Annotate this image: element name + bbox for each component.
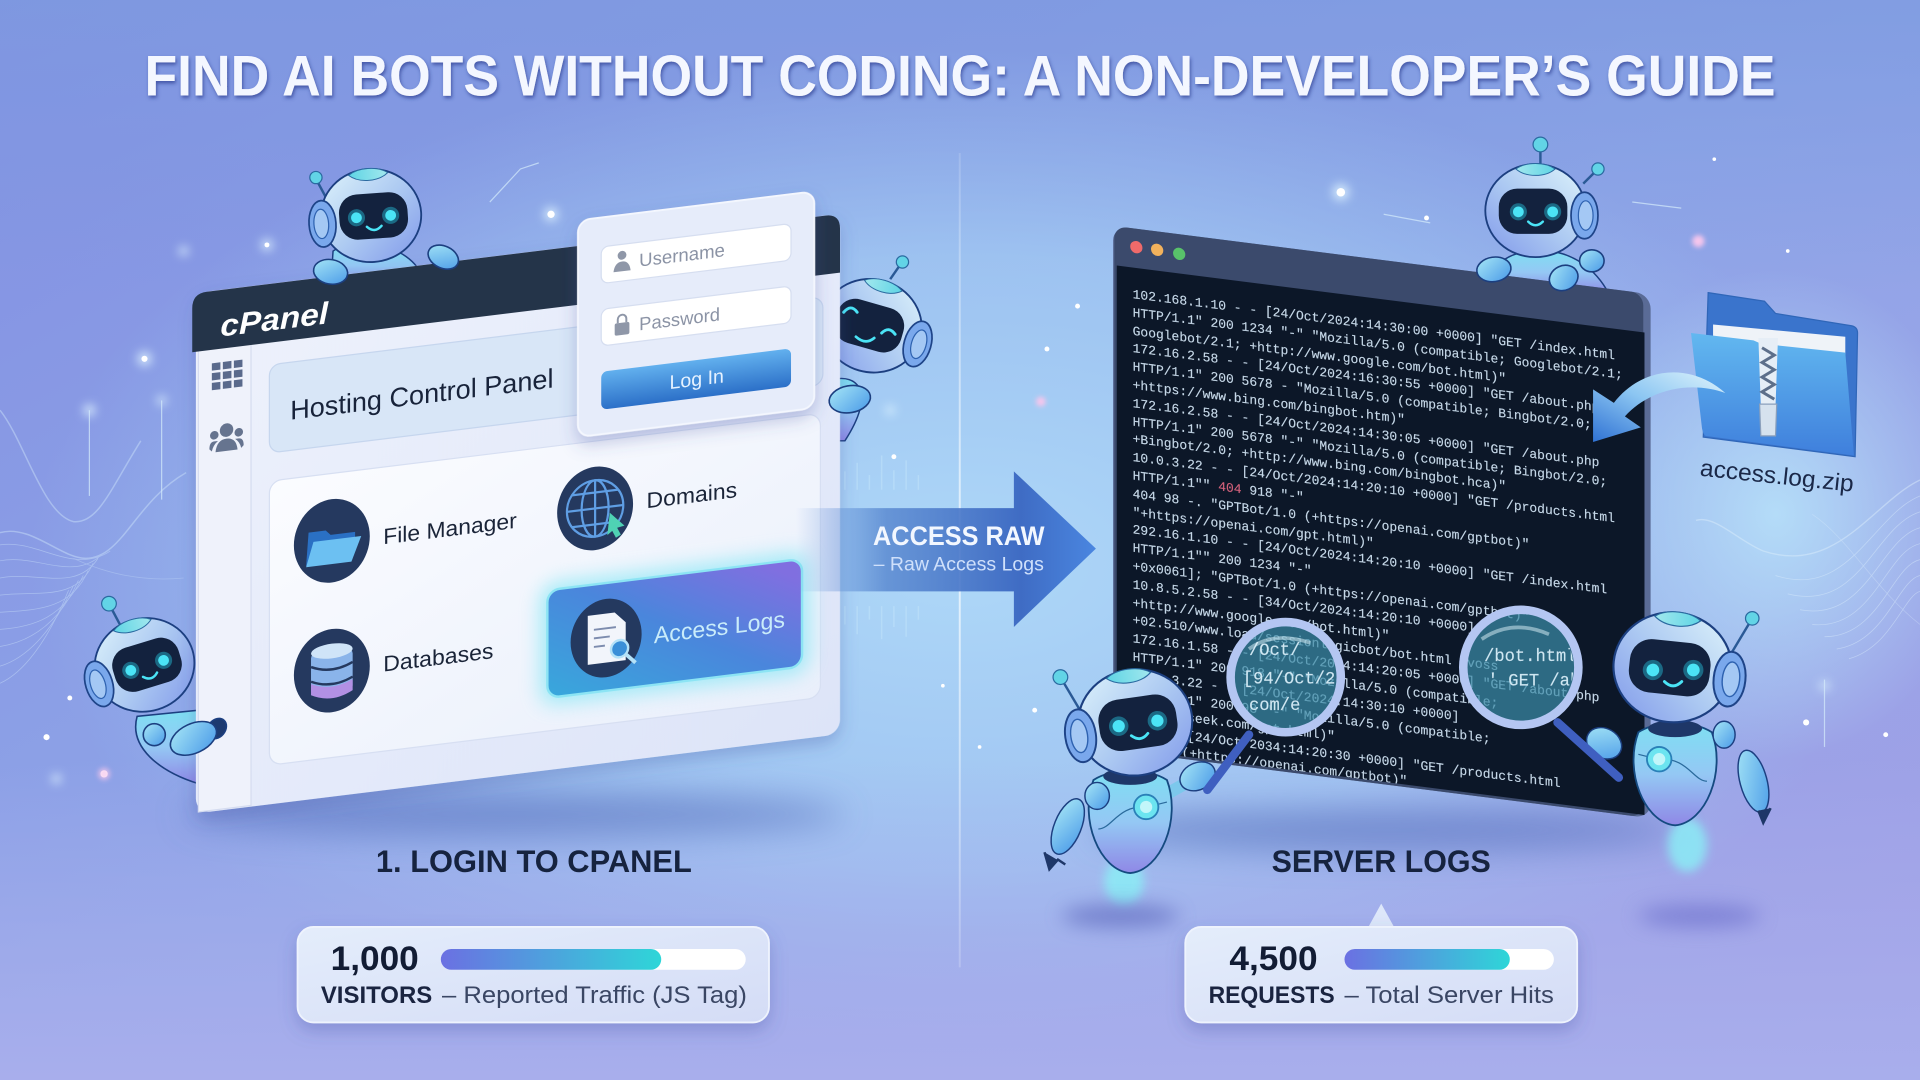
visitors label: VISITORS <box>321 982 432 1009</box>
log text: 292.16.1.10 - - [24/Oct/2024:14:20:10 +0000] "GET /index.html <box>1133 522 1607 598</box>
wave pattern left <box>0 410 186 683</box>
tile: Access Logs (highlighted) <box>540 551 809 706</box>
log text: 172.16.1.58 - - [24/Oct/2024:14:20:05 +0000] "GET /about.php <box>1133 631 1599 705</box>
log text: +0x0061]; "GPTBot/1.0 (+https://openai.com/gptbot)" <box>1133 559 1529 624</box>
password field <box>601 286 791 346</box>
terminal frame <box>1113 226 1651 818</box>
log text: 102.168.1.10 - - [24/Oct/2024:14:30:00 +0000] "GET /index.html <box>1133 287 1615 363</box>
requests bar <box>1344 949 1554 970</box>
magnifier 2: /bot.html) <box>1484 648 1587 667</box>
title: FIND AI BOTS WITHOUT CODING: A NON-DEVELOPER’S GUIDE <box>144 45 1776 109</box>
magnifier 1: [94/Oct/2 <box>1243 670 1335 689</box>
visitors bar <box>441 949 746 970</box>
robot: peeking from right of panel <box>811 256 945 441</box>
heading band <box>269 297 823 453</box>
robot: holding magnifier left <box>1044 661 1220 906</box>
username field <box>601 224 791 284</box>
log text: (+https://openai.com/gptbot)" <box>1182 745 1407 789</box>
terminal screen <box>1117 265 1644 815</box>
login card: Password <box>639 303 720 334</box>
log text: HTTP/1.1" 200 918 "-" "Mozilla/5.0 (compatible; <box>1133 650 1498 711</box>
requests number: 4,500 <box>1229 940 1318 978</box>
log text: 20.0.3.22 - - [24/Oct/2024:14:30:10 +0000] <box>1133 668 1459 724</box>
login card: Username <box>639 239 725 271</box>
robot hands over panel <box>143 240 873 762</box>
login card <box>578 191 814 437</box>
magnifier 1: /Oct/ <box>1249 642 1300 661</box>
log text: HTTP/1.1" 200 5678 "-" "Mozilla/5.0 (compatible; Bingbot/2.0; <box>1133 415 1607 490</box>
log text: HTTP/1.1"" 200 1234 "-" <box>1133 541 1312 578</box>
log text <box>1133 287 1623 816</box>
stat card: visitors: – Reported Traffic (JS Tag) <box>442 982 747 1009</box>
file name: access.log.zip <box>1699 455 1855 498</box>
panel header bar <box>192 214 840 352</box>
magnifier 1 <box>1207 622 1341 790</box>
log window shadow <box>1090 808 1678 852</box>
content area <box>269 413 820 765</box>
caption: login to cPanel: 1. LOGIN TO CPANEL <box>376 843 692 879</box>
heading: Hosting Control Panel: Hosting Control Panel <box>290 364 553 426</box>
robot hands over log window <box>1475 250 1604 295</box>
tile: File Manager <box>294 476 517 587</box>
arrow label: ACCESS RAW <box>873 521 1045 551</box>
panel shadow <box>184 792 845 836</box>
panel: server log terminal <box>1113 226 1651 820</box>
log text: HTTP/1.1" 200 98 "-" "Mozilla/5.0 (compatible; <box>1133 686 1491 747</box>
log text: +http://www.google.com/bot.html)" <box>1133 596 1389 643</box>
visitors number: 1,000 <box>331 940 419 978</box>
robot: peeking over panel top <box>305 165 424 288</box>
sidebar <box>198 336 251 812</box>
stat card: requests: – Total Server Hits <box>1344 982 1554 1009</box>
tile: Databases <box>294 609 493 717</box>
log text: +Yahoo/seek.com/gpt.html)" <box>1133 704 1335 744</box>
requests label: REQUESTS <box>1209 982 1335 1009</box>
tile: Domains: Domains <box>647 477 737 513</box>
magnifier 2 <box>1463 610 1619 778</box>
icon: zip folder <box>1593 293 1858 498</box>
log text: "+https://openai.com/gpt.html)" <box>1133 505 1374 551</box>
vertical divider <box>959 153 961 967</box>
robot ground shadows <box>1062 905 1761 927</box>
wave pattern right <box>1696 480 1920 659</box>
log text: +02.510/www.load/sessionlogicbot/bot.html vvoss <box>1133 613 1498 674</box>
log text: 404 98 -. "GPTBot/1.0 (+https://openai.com/gptbot)" <box>1133 487 1529 552</box>
log text: HTTP/1.1" 200 5678 - "Mozilla/5.0 (compatible; Bingbot/2.0; <box>1133 359 1592 433</box>
stat card: requests <box>1185 904 1577 1022</box>
log text: HTTP/1.1" 200 1234 "-" "Mozilla/5.0 (compatible; Googlebot/2.1; <box>1133 306 1623 383</box>
log text: HTTP/1.1"" 404 918 "-" <box>1133 468 1304 505</box>
login card: Log In <box>670 365 724 394</box>
log text: 12 - - [24/Oct/2034:14:20:30 +0000] "GET /products.html <box>1133 722 1561 791</box>
caption: server logs: SERVER LOGS <box>1272 843 1491 879</box>
window controls <box>1130 240 1185 261</box>
tile: Access Logs (highlighted): Access Logs <box>654 606 785 648</box>
log text: +https://www.bing.com/bingbot.htm)" <box>1133 378 1405 427</box>
tile: Domains <box>557 449 737 555</box>
log text: 172.16.2.58 - - [24/Oct/2024:14:30:05 +0000] "GET /about.php <box>1133 396 1599 470</box>
magnifier 1: com/e <box>1249 697 1300 716</box>
log text: 10.0.3.22 - - [24/Oct/2024:14:20:10 +0000] "GET /products.html <box>1133 450 1615 526</box>
log in button <box>601 348 791 410</box>
log text: 10.8.5.2.58 - - [34/Oct/2024:14:20:10 +0000] <box>1133 577 1475 636</box>
arrow: access raw <box>796 471 1096 627</box>
log text: 172.16.2.58 - - [24/Oct/2024:16:30:55 +0000] "GET /about.php <box>1133 341 1599 415</box>
tile: Databases: Databases <box>383 638 493 677</box>
cPanel logo: cPanel <box>220 295 330 344</box>
background particles <box>43 157 1888 784</box>
panel: cPanel window <box>192 188 840 814</box>
robot: top right behind log window <box>1485 137 1609 294</box>
magnifier 2: ' GET /abo <box>1488 673 1591 692</box>
icon: users <box>209 421 244 453</box>
icon: grid <box>212 360 242 390</box>
robot: peeking from left of panel <box>71 596 206 784</box>
arrow: access raw: – Raw Access Logs <box>874 555 1044 576</box>
panel body <box>196 214 840 813</box>
curved arrow <box>1593 372 1725 442</box>
robot: holding magnifier right <box>1581 606 1775 872</box>
log text: +Bingbot/2.0; +http://www.bing.com/bingbot.hca)" <box>1133 432 1506 494</box>
tile: File Manager: File Manager <box>383 508 517 549</box>
log text: Googlebot/2.1; +http://www.google.com/bot.html)" <box>1133 324 1506 386</box>
stat card: visitors <box>298 927 769 1022</box>
